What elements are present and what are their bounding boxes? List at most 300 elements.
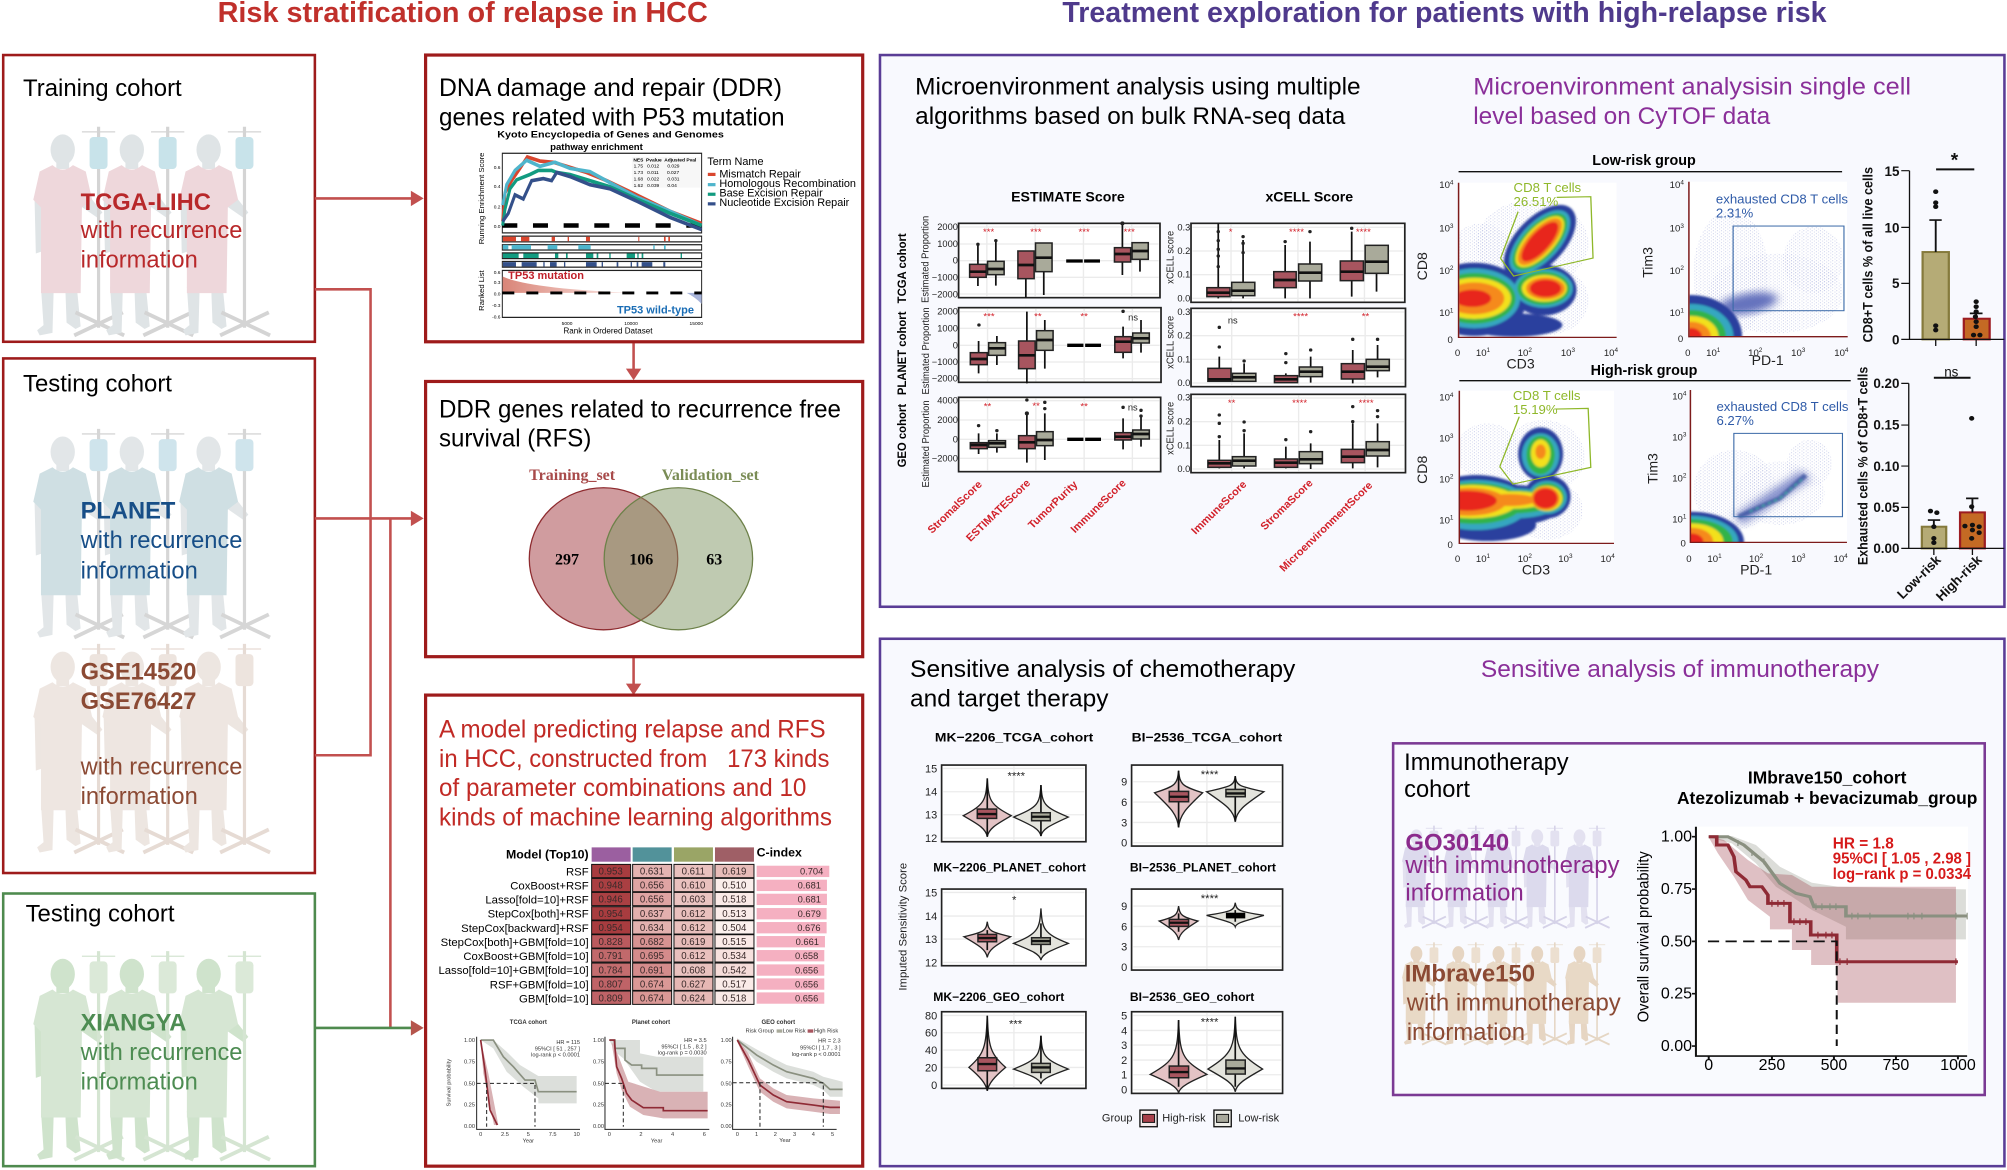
table: top 10 models heatmap: 0.619	[722, 867, 746, 878]
table: top 10 models heatmap: 0.954	[599, 923, 623, 934]
text: flow axis labels: Tim3	[1639, 247, 1655, 278]
chart: IMbrave150 survival curve: 500	[1821, 1057, 1847, 1074]
chart: GSEA enrichment	[477, 130, 724, 335]
text: bar chart labels: CD8+T cells % of all live cells	[1860, 167, 1876, 342]
chart: GSEA enrichment: 1.62 0.039 0.04	[634, 183, 677, 189]
label: IMbrave150	[1405, 961, 1621, 1046]
bar chart: CD8 T cells	[1901, 169, 2004, 346]
chart: GEO KM: 95%CI [ 1.7 , 3 ]	[800, 1045, 841, 1051]
axis tick labels: 0.3	[1177, 222, 1190, 232]
label: GO30140: with immunotherapy	[1404, 852, 1620, 879]
table: top 10 models heatmap: 0.682	[640, 937, 664, 948]
text: gate labels: 26.51%	[1514, 194, 1559, 209]
significance stars: **	[1362, 312, 1370, 323]
text: flow tick labels: 3	[1802, 347, 1806, 354]
bar chart: exhausted cells	[1901, 378, 2004, 555]
chart: ESTIMATE and xCELL boxplots: xCELL score	[1165, 402, 1176, 455]
text: flow group titles: High-risk group	[1591, 363, 1698, 379]
legend: GSEA terms: Term Name	[707, 156, 764, 168]
table: top 10 models heatmap: RSF+GBM[fold=10]	[490, 979, 589, 991]
chart: venn diagram: Validation_set	[662, 467, 760, 484]
text: flow tick labels: 10	[1670, 224, 1680, 235]
table: top 10 models heatmap: Lasso[fold=10]+RSF	[485, 895, 589, 907]
significance marks: ****	[1201, 893, 1219, 905]
chart: Planet KM: 0.50	[593, 1081, 604, 1087]
tick labels: 5	[1121, 1010, 1127, 1022]
table: top 10 models heatmap: RSF	[566, 867, 589, 879]
chart: GEO KM: 5	[831, 1132, 834, 1138]
text: bar chart labels: 0.00	[1873, 541, 1899, 556]
chart: GSEA enrichment: 10000	[624, 321, 638, 327]
boxplots: xCELL row 1 to 3	[1207, 223, 1389, 469]
panel: training cohort	[3, 55, 315, 342]
chart: GEO KM: 3	[793, 1132, 796, 1138]
table: top 10 models heatmap: 0.656	[640, 895, 664, 906]
text: flow tick labels: 10	[1439, 266, 1450, 277]
chart: GSEA enrichment: NES Pvalue Adjusted Pval	[633, 157, 696, 163]
table: top 10 models heatmap: 0.784	[599, 965, 623, 976]
tick labels: 1	[1121, 1070, 1127, 1082]
axis tick labels: 2000	[937, 307, 958, 317]
table: top 10 models heatmap: 0.612	[681, 951, 705, 962]
table: top 10 models heatmap: Model (Top10)	[506, 847, 589, 861]
violins: row two	[964, 903, 1264, 960]
label: GSE14520 GSE76427	[80, 660, 242, 810]
axis tick labels: 0.1	[1177, 354, 1190, 364]
chart: GSEA enrichment: 1.68 0.022 0.031	[634, 176, 680, 182]
chart: IMbrave150 survival curve: 0	[1704, 1057, 1713, 1074]
label: GO30140: information	[1405, 880, 1524, 907]
text: flow tick labels: 2	[1683, 472, 1687, 479]
axis tick labels: 2000	[937, 415, 958, 425]
label: GSE14520 GSE76427: GSE76427	[81, 689, 196, 715]
legend: group: High-risk	[1162, 1113, 1206, 1125]
text: flow tick labels: 10	[1439, 393, 1450, 404]
table: top 10 models heatmap: 0.510	[722, 881, 746, 892]
heading: chemotherapy sensitivity: Sensitive analysis of chemotherapy	[910, 656, 1296, 683]
chart: GEO KM: log-rank p < 0.0001	[792, 1052, 841, 1058]
chart: Planet KM: 2	[639, 1132, 643, 1138]
significance marks: *	[1012, 895, 1017, 907]
tick labels: 9	[1121, 901, 1127, 913]
label: TCGA-LIHC	[80, 190, 242, 274]
text: flow tick labels: 2	[1759, 347, 1763, 354]
text: flow tick labels: 4	[1450, 392, 1454, 399]
legend: GSEA terms	[707, 156, 856, 209]
label: XIANGYA: XIANGYA	[81, 1010, 186, 1036]
rotated x labels: ESTIMATEScore	[964, 477, 1033, 544]
chart: GSEA enrichment: pathway enrichment	[550, 142, 644, 153]
chart: GSEA enrichment: Ranked List	[477, 269, 486, 311]
axis tick labels: 0.0	[1177, 464, 1190, 474]
chart: IMbrave150 survival curve: 95%CI [ 1.05 , 2.98 ]	[1833, 850, 1971, 867]
chart: GSEA enrichment: 0.2	[494, 205, 501, 211]
panel: testing cohort XIANGYA	[3, 894, 315, 1166]
significance stars: *	[1229, 227, 1233, 238]
rotated x labels: StromalScore	[926, 479, 985, 536]
text: flow tick labels: 10	[1672, 473, 1683, 484]
tick labels: 40	[925, 1045, 937, 1057]
tick labels: 60	[925, 1028, 937, 1040]
text: bar chart labels: 0.10	[1873, 459, 1899, 474]
table: top 10 models heatmap: 0.612	[681, 923, 705, 934]
chart: IMbrave150 survival curve: 1000	[1940, 1057, 1976, 1074]
chart: IMbrave150 survival curve: 0.00	[1661, 1038, 1692, 1055]
chart: IMbrave150 survival curve: 0.75	[1661, 881, 1692, 898]
text: flow tick labels: 1	[1680, 307, 1684, 314]
text: flow tick labels: 3	[1680, 223, 1684, 230]
text: flow tick labels: 3	[1802, 553, 1806, 560]
chart: KM curves for three cohorts	[447, 1020, 843, 1145]
chart: GEO KM: High Risk	[814, 1029, 838, 1035]
chart: ESTIMATE and xCELL boxplots: xCELL score	[1165, 316, 1176, 369]
tick labels: 14	[925, 911, 937, 923]
label: PLANET: PLANET	[81, 498, 176, 524]
table: top 10 models heatmap: CoxBoost+GBM[fold=10]	[463, 951, 589, 963]
tick labels: 6	[1121, 797, 1127, 809]
chart: GSEA enrichment: -0.3	[492, 303, 501, 309]
heading: chemotherapy sensitivity: and target therapy	[910, 686, 1109, 713]
text: flow tick labels: 2	[1680, 265, 1684, 272]
chart: ESTIMATE and xCELL boxplots	[897, 189, 1405, 574]
text: flow tick labels	[1439, 179, 1849, 565]
text: flow tick labels: 10	[1672, 514, 1683, 525]
panel: testing cohort PLANET and GEO	[3, 358, 315, 873]
icon: three TCGA patients with IV poles	[33, 127, 270, 335]
chart: IMbrave150 survival curve: HR = 1.8	[1833, 835, 1894, 852]
panel: DDR genes and P53	[426, 55, 863, 342]
text: flow tick labels: 0	[1686, 554, 1692, 565]
chart: GSEA enrichment: 0.0	[494, 224, 501, 230]
axis tick labels: 0.2	[1177, 331, 1190, 341]
chart: GSEA enrichment: 0.0	[494, 292, 501, 298]
chart: GEO KM: 0.75	[721, 1060, 732, 1066]
significance stars: ****	[1292, 398, 1307, 409]
chart: violin plots for drug sensitivity: BI−2536_GEO_cohort	[1130, 991, 1254, 1004]
axis tick labels: 0	[953, 434, 958, 444]
text: flow tick labels: 2	[1528, 347, 1532, 354]
heading: bulk RNA-seq microenvironment	[915, 74, 1361, 130]
chart: TCGA KM: 7.5	[549, 1132, 557, 1138]
icon: IMbrave150 patients	[1402, 942, 1610, 1045]
axis tick labels: 0	[953, 340, 958, 350]
text: bar chart labels: Low-risk	[1894, 552, 1944, 602]
chart: GEO KM	[721, 1020, 843, 1144]
text: flow tick labels: 3	[1683, 432, 1687, 439]
panel: testing cohort XIANGYA: Testing cohort	[26, 901, 175, 928]
chart: GEO KM: 0	[736, 1132, 739, 1138]
text: bar chart labels: ns	[1944, 364, 1959, 379]
legend: GSEA terms: Nucleotide Excision Repair	[719, 197, 850, 209]
plot: low-risk PD-1 Tim3	[1688, 182, 1848, 338]
text: bar chart labels: Exhausted cells % of CD8+T cells	[1854, 367, 1870, 565]
text: flow tick labels: 10	[1439, 516, 1450, 527]
label: XIANGYA: with recurrence	[80, 1040, 242, 1066]
text: flow tick labels: 2	[1450, 474, 1454, 481]
text: flow tick labels: 10	[1601, 554, 1611, 565]
significance stars: ***	[983, 312, 995, 323]
text: bar chart labels	[1854, 150, 1985, 604]
panel: immunotherapy cohort	[1393, 743, 1985, 1095]
panel: DDR genes related to RFS: DDR genes related to recurrence free	[439, 395, 841, 423]
chart: GEO KM: 0.25	[721, 1102, 732, 1108]
significance marks: ***	[1009, 1018, 1023, 1030]
label: PLANET: with recurrence	[80, 528, 242, 554]
text: flow tick labels: 10	[1834, 348, 1845, 359]
chart: venn diagram: 63	[706, 552, 722, 569]
rotated x labels	[926, 477, 1375, 574]
table: top 10 models heatmap: 0.610	[681, 881, 705, 892]
panel: DDR genes related to RFS: survival (RFS)	[439, 425, 591, 453]
label: TCGA-LIHC: with recurrence	[80, 218, 242, 244]
table: top 10 models heatmap: 0.513	[722, 909, 746, 920]
chart: Planet KM: 0.75	[593, 1060, 604, 1066]
chart: TCGA KM: 10	[573, 1132, 580, 1138]
heading: bulk RNA-seq microenvironment: Microenvironment analysis using multiple	[915, 74, 1361, 101]
table: top 10 models heatmap: 0.627	[681, 979, 705, 990]
text: flow tick labels: 10	[1439, 224, 1450, 235]
tick labels: 3	[1121, 1040, 1127, 1052]
chart: TCGA KM: Survival probability	[447, 1059, 453, 1106]
chart: GEO KM: 2	[774, 1132, 777, 1138]
panel: immunotherapy cohort: Immunotherapy	[1404, 750, 1569, 776]
text: flow tick labels: 0	[1455, 348, 1460, 359]
rotated x labels: TumorPurity	[1026, 479, 1080, 531]
text: flow tick labels: 2	[1450, 265, 1454, 272]
text: flow group titles: Low-risk group	[1592, 153, 1696, 169]
text: gate labels: 6.27%	[1716, 413, 1754, 428]
table: top 10 models heatmap: 0.518	[722, 895, 746, 906]
chart: GSEA enrichment: 5000	[562, 321, 573, 327]
text: flow tick labels: 4	[1683, 391, 1687, 398]
icon: three PLANET patients	[33, 429, 270, 637]
significance marks: ****	[1201, 769, 1219, 781]
significance marks: ****	[1201, 1016, 1219, 1028]
table: top 10 models heatmap: 0.791	[599, 951, 623, 962]
table: top 10 models heatmap: 0.704	[800, 867, 823, 877]
chart: TCGA KM	[447, 1020, 580, 1145]
chart: TCGA KM: HR = 115	[556, 1040, 580, 1046]
chart: ESTIMATE and xCELL boxplots: Estimated Proportion	[921, 307, 932, 395]
panel: DDR genes and P53: DNA damage and repair (DDR)	[439, 74, 782, 102]
chart: GEO KM: 4	[812, 1132, 815, 1138]
axis tick labels: −1000	[932, 357, 958, 367]
label: PLANET	[80, 498, 242, 585]
text: flow tick labels: 10	[1439, 180, 1450, 191]
rotated x labels: StromaScore	[1258, 477, 1316, 533]
text: flow tick labels: 1	[1450, 307, 1454, 314]
table: top 10 models heatmap: 0.828	[599, 937, 623, 948]
chart: Planet KM: Planet cohort	[632, 1020, 670, 1026]
heading: immunotherapy sensitivity: Sensitive analysis of immunotherapy	[1481, 656, 1880, 683]
text: flow tick labels: 10	[1791, 348, 1802, 359]
text: flow tick labels: 10	[1670, 266, 1680, 277]
text: flow tick labels: 4	[1611, 553, 1615, 560]
significance stars	[983, 227, 1374, 413]
legend: group: Group	[1102, 1113, 1132, 1125]
text: flow axis labels: PD-1	[1752, 352, 1784, 368]
label: XIANGYA: information	[81, 1069, 198, 1095]
table: top 10 models heatmap: 0.661	[796, 937, 819, 947]
icon: three GEO patients	[33, 644, 270, 853]
text: flow tick labels: 10	[1833, 554, 1844, 565]
axis tick labels: 0.2	[1177, 246, 1190, 256]
table: top 10 models heatmap: 0.656	[640, 881, 664, 892]
table: top 10 models heatmap: 0.676	[797, 923, 821, 933]
text: flow tick labels: 10	[1604, 348, 1615, 359]
axis tick labels: 1000	[937, 323, 958, 333]
table: top 10 models heatmap: CoxBoost+RSF	[510, 881, 589, 893]
chart: GSEA enrichment: 0.3	[494, 280, 501, 286]
axis tick labels: −2000	[932, 374, 958, 384]
text: bar chart labels: *	[1951, 150, 1959, 171]
chart: Planet KM: Year	[651, 1139, 662, 1145]
chart: venn diagram: Training_set	[529, 467, 616, 484]
tick labels: 12	[925, 833, 937, 845]
chart: IMbrave150 survival curve: Overall survival probability	[1636, 851, 1653, 1022]
table: top 10 models heatmap: 0.954	[599, 909, 623, 920]
group divider lines	[1459, 172, 1851, 381]
table: top 10 models heatmap: 0.542	[722, 965, 746, 976]
label: TCGA-LIHC: information	[81, 248, 198, 274]
text: flow tick labels: 10	[1707, 554, 1718, 565]
table: top 10 models heatmap: 0.807	[599, 979, 623, 990]
label: GO30140: GO30140	[1405, 830, 1509, 857]
chart: TCGA KM: 1.00	[464, 1038, 475, 1044]
text: flow tick labels: 3	[1450, 433, 1454, 440]
panel: DDR genes related to RFS	[426, 381, 863, 657]
chart: TCGA KM: 5	[527, 1132, 530, 1138]
chart: violin plots for drug sensitivity: MK−2206_PLANET_cohort	[933, 862, 1086, 875]
table: top 10 models heatmap: 0.656	[795, 965, 818, 975]
tick labels: 4	[1121, 1025, 1127, 1037]
chart: Planet KM: log-rank p = 0.0030	[658, 1051, 707, 1057]
axis tick labels: 0.3	[1177, 307, 1190, 317]
text: flow tick labels: 10	[1518, 554, 1528, 565]
heading: CyTOF microenvironment: level based on CyTOF data	[1473, 103, 1771, 130]
chart: ESTIMATE and xCELL boxplots: xCELL score	[1165, 231, 1176, 284]
table: top 10 models heatmap: 0.681	[798, 881, 821, 891]
chart: ESTIMATE and xCELL boxplots: ns	[1128, 402, 1138, 412]
chart: ESTIMATE and xCELL boxplots: ESTIMATE Score	[1011, 189, 1125, 205]
axis tick labels: 2000	[937, 222, 958, 232]
text: flow tick labels: 4	[1450, 179, 1454, 186]
panel: immunotherapy cohort: cohort	[1404, 777, 1470, 803]
legend: GSEA terms: Homologous Recombination	[719, 178, 856, 190]
text: gate labels: exhausted CD8 T cells	[1716, 192, 1848, 207]
outlier points	[976, 221, 1379, 441]
chart: IMbrave150 survival curve: 1.00	[1661, 829, 1692, 846]
table: top 10 models heatmap: 0.809	[599, 993, 623, 1004]
tick labels: 13	[925, 934, 937, 946]
table: top 10 models heatmap: StepCox[backward]+RSF	[461, 923, 589, 935]
axis tick labels: 0.1	[1177, 440, 1190, 450]
text: bar chart labels: 0.05	[1873, 500, 1900, 515]
table: top 10 models heatmap: 0.695	[640, 951, 664, 962]
tick labels: 20	[925, 1062, 937, 1074]
axis tick labels: 4000	[937, 396, 958, 406]
text: flow axis labels: CD8	[1414, 252, 1430, 280]
text: flow tick labels: 1	[1683, 513, 1687, 520]
text: flow axis labels: PD-1	[1740, 562, 1772, 578]
rotated x labels: ImmuneScore	[1068, 477, 1129, 536]
chart: violin plots for drug sensitivity: BI−2536_TCGA_cohort	[1132, 731, 1282, 745]
chart: GEO KM: Risk Group	[746, 1029, 774, 1035]
text: flow tick labels: 1	[1717, 347, 1721, 354]
chart: IMbrave150 survival curve: 0.50	[1661, 934, 1692, 951]
table: top 10 models heatmap: Lasso[fold=10]+GBM[fold=10]	[438, 965, 589, 977]
label: PLANET: information	[81, 559, 198, 585]
text: flow tick labels: 10	[1670, 180, 1680, 191]
axis tick labels: −2000	[932, 453, 958, 463]
tick labels: 6	[1121, 921, 1127, 933]
chart: GEO KM: Year	[779, 1138, 791, 1144]
table: top 10 models heatmap: 0.534	[722, 951, 747, 962]
chart: venn diagram	[529, 467, 760, 630]
text: bar chart labels: 10	[1885, 220, 1899, 235]
table: top 10 models heatmap: C-index	[757, 846, 802, 860]
tick labels: 9	[1121, 777, 1127, 789]
chart: GSEA enrichment: 0.4	[494, 184, 501, 190]
text: flow tick labels: 4	[1845, 347, 1849, 354]
violins: row one	[963, 771, 1264, 837]
chart: GEO KM: Low Risk	[783, 1029, 806, 1035]
chart: GSEA enrichment: 1.73 0.011 0.027	[634, 170, 679, 176]
table: top 10 models heatmap: 0.674	[640, 979, 665, 990]
chart: IMbrave150 survival curve: log−rank p = 0.0334	[1833, 866, 1971, 883]
text: bar chart labels: 0.15	[1873, 417, 1900, 432]
table: top 10 models heatmap: 0.603	[681, 895, 705, 906]
table: top 10 models heatmap: 0.515	[722, 937, 746, 948]
tick labels: 80	[925, 1010, 937, 1022]
text: bar chart labels: 5	[1892, 276, 1900, 291]
chart: TCGA KM: TCGA cohort	[510, 1020, 547, 1026]
tick labels: 0	[931, 1080, 937, 1092]
chart: ESTIMATE and xCELL boxplots: Estimated Proportion	[920, 216, 932, 303]
icon: three XIANGYA patients	[33, 951, 270, 1160]
text: model description: A model predicting relapse and RFS	[439, 715, 826, 743]
text: flow tick labels: 0	[1448, 335, 1453, 346]
table: top 10 models heatmap: 0.948	[599, 881, 623, 892]
table: top 10 models heatmap: StepCox[both]+GBM[fold=10]	[441, 937, 589, 949]
chart: TCGA KM: 0.00	[464, 1124, 475, 1130]
chart: TCGA KM: Year	[523, 1139, 534, 1145]
chart: Planet KM: 95%CI [ 1.5 , 8.2 ]	[661, 1045, 707, 1051]
boxplots: ESTIMATE row 1 to 3	[970, 223, 1149, 463]
axis tick labels: 0.0	[1177, 378, 1190, 388]
tick labels: 0	[1121, 1085, 1127, 1097]
tick labels: 2	[1121, 1055, 1127, 1067]
chart: Planet KM: 0	[608, 1132, 611, 1138]
label: IMbrave150: information	[1407, 1019, 1525, 1046]
chart: ESTIMATE and xCELL boxplots: xCELL Score	[1265, 189, 1353, 205]
tick labels: 3	[1121, 942, 1127, 954]
significance stars: ****	[1356, 227, 1371, 238]
chart: violin plots for drug sensitivity: MK−2206_GEO_cohort	[933, 991, 1064, 1004]
chart: violin plots for drug sensitivity: BI−2536_PLANET_cohort	[1130, 862, 1276, 875]
table: top 10 models heatmap: 0.517	[722, 979, 746, 990]
significance stars: ****	[1293, 312, 1308, 323]
chart: GSEA enrichment: 1.75 0.012 0.029	[634, 164, 680, 170]
chart: GSEA enrichment: -0.6	[492, 315, 501, 321]
chart: Planet KM: HR = 3.5	[684, 1038, 707, 1044]
text: flow tick labels: 10	[1476, 348, 1487, 359]
legend: GSEA terms: Mismatch Repair	[719, 168, 801, 180]
icon: GO30140 patients	[1402, 826, 1610, 928]
text: flow tick labels: 4	[1844, 553, 1848, 560]
label: IMbrave150: IMbrave150	[1405, 961, 1535, 988]
significance stars: **	[984, 402, 992, 413]
